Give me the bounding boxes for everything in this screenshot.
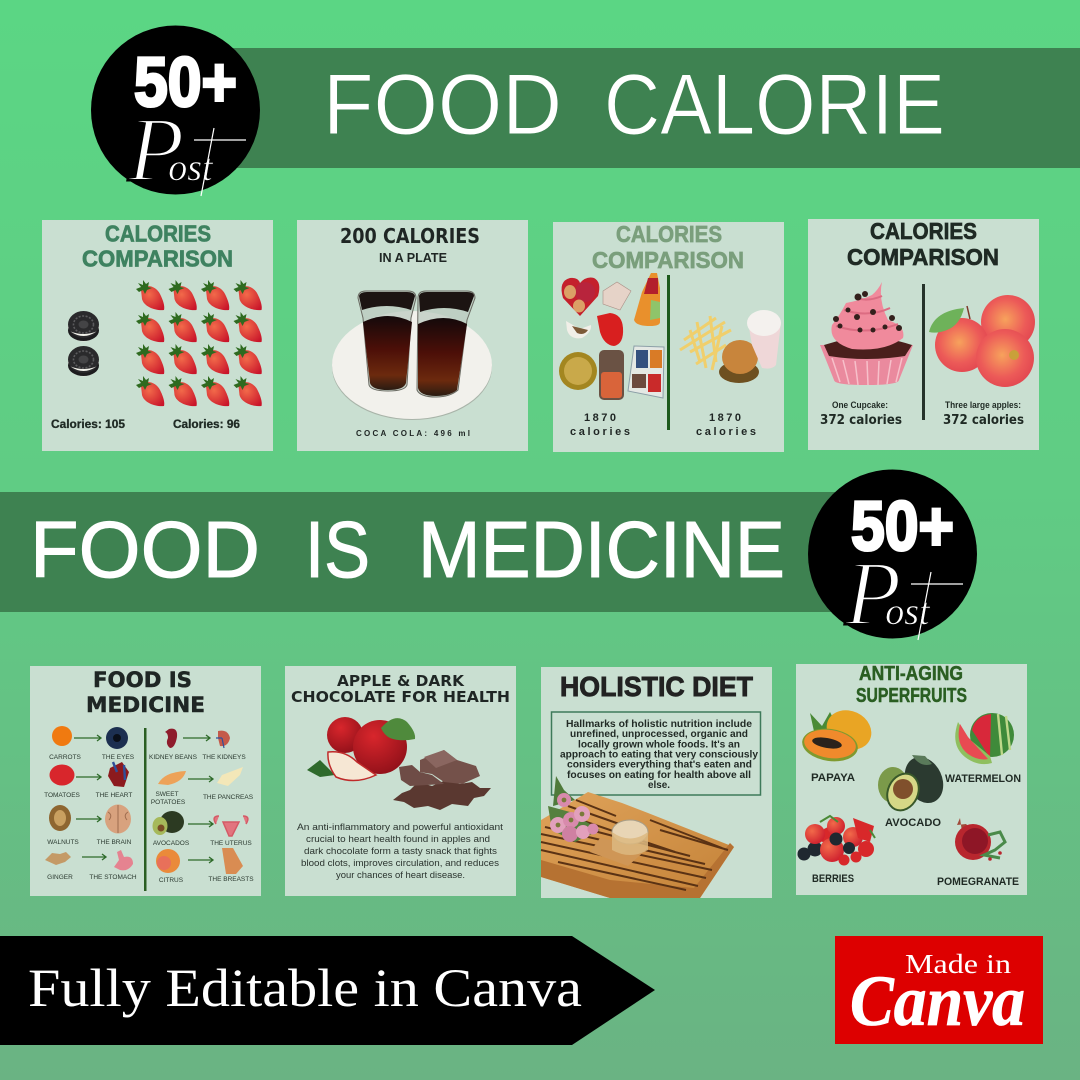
badge: 50+ post top <box>91 26 260 200</box>
body text: crucial to heart health found in apples and <box>306 834 490 844</box>
panel title: 200 CALORIES <box>340 224 480 248</box>
food to organ pairs, right column: THE KIDNEYS <box>202 754 246 761</box>
panel: calories comparison, cupcake and apples <box>808 218 1039 450</box>
fruit: avocado <box>878 751 950 817</box>
label: AVOCADO <box>885 817 941 829</box>
food to organ pairs, left column: THE HEART <box>96 792 132 799</box>
text box: focuses on eating for health above all <box>567 770 751 781</box>
panel title: SUPERFRUITS <box>856 685 967 707</box>
calorie labels: calories <box>570 426 630 438</box>
illustration: healthy food <box>559 273 664 400</box>
illustration: dark chocolate pieces <box>393 750 491 810</box>
illustration: wooden tea tray <box>541 792 734 898</box>
panel title: ANTI-AGING <box>859 663 963 685</box>
heading: food is medicine: IS <box>305 505 370 594</box>
badge: made in canva: Canva <box>850 961 1025 1041</box>
food to organ pairs, right column: THE UTERUS <box>210 840 252 847</box>
calorie labels <box>51 419 240 431</box>
text box: else. <box>648 780 670 791</box>
fruit: watermelon <box>955 713 1014 764</box>
panel: calories comparison, oreos and strawberries <box>42 220 273 451</box>
divider <box>667 275 670 430</box>
divider <box>922 284 925 420</box>
panel title <box>86 668 205 717</box>
panel title: FOOD IS <box>93 668 192 692</box>
food to organ pairs, left column <box>44 726 137 881</box>
illustration: cupcake <box>820 282 913 385</box>
food to organ pairs, left column: THE STOMACH <box>89 874 137 881</box>
panel title: CHOCOLATE FOR HEALTH <box>291 688 510 706</box>
badge: 50+ post middle: 50+ <box>851 487 954 565</box>
text box <box>552 712 760 795</box>
label: PAPAYA <box>811 772 855 784</box>
text box: unrefined, unprocessed, organic and <box>570 729 748 740</box>
calorie labels: 1870 <box>709 412 741 424</box>
body text: blood clots, improves circulation, and reduces <box>301 858 499 868</box>
label: WATERMELON <box>945 773 1021 785</box>
divider <box>144 728 146 891</box>
calorie labels <box>570 412 756 438</box>
arrow banner: fully editable in canva: Fully Editable in Canva <box>28 958 582 1018</box>
food to organ pairs, right column: POTATOES <box>151 799 186 806</box>
heading: food is medicine <box>30 505 785 594</box>
panel title <box>856 663 967 707</box>
caption: COCA COLA: 496 ml <box>356 429 470 438</box>
badge: made in canva <box>835 936 1043 1044</box>
calorie labels: One Cupcake: <box>832 400 888 410</box>
icon: strawberries grid <box>136 280 262 406</box>
heading: food is medicine: FOOD <box>30 505 260 594</box>
food to organ pairs, left column: THE BRAIN <box>97 839 132 846</box>
panel: 200 calories in a plate <box>297 220 528 451</box>
panel title: COMPARISON <box>82 246 233 272</box>
food to organ pairs, left column: THE EYES <box>102 754 135 761</box>
food to organ pairs, right column: THE PANCREAS <box>203 794 254 801</box>
food to organ pairs, right column: AVOCADOS <box>153 840 190 847</box>
heading: food calorie: CALORIE <box>604 57 945 153</box>
food to organ pairs, right column <box>149 729 254 884</box>
calorie labels: calories <box>696 426 756 438</box>
calorie labels: Calories: 96 <box>173 419 240 431</box>
text box: considers everything that's eaten and <box>567 760 752 770</box>
illustration: fast food <box>680 310 781 383</box>
panel title <box>82 220 233 272</box>
panel title: COMPARISON <box>847 244 999 270</box>
panel title: CALORIES <box>105 220 211 246</box>
badge: made in canva: Made in <box>905 949 1012 979</box>
panel title <box>592 221 744 273</box>
food to organ pairs, right column: SWEET <box>155 791 179 798</box>
badge: 50+ post middle: Post <box>844 542 931 644</box>
badge: 50+ post top: 50+ <box>134 43 237 121</box>
illustration: pink flowers <box>548 776 600 842</box>
heading: food is medicine: MEDICINE <box>418 505 785 594</box>
panel: apple and dark chocolate <box>285 666 516 896</box>
illustration: apples <box>929 295 1035 387</box>
panel: holistic diet <box>541 667 772 898</box>
calorie labels: 1870 <box>584 412 616 424</box>
food to organ pairs, left column: TOMATOES <box>44 792 81 799</box>
text box: Hallmarks of holistic nutrition include <box>566 719 752 730</box>
panel: calories comparison, healthy food and fast food <box>553 221 784 452</box>
body text: dark chocolate form a tasty snack that fights <box>304 846 497 856</box>
body text <box>297 822 503 880</box>
panel: anti-aging superfruits <box>796 663 1027 895</box>
panel title: CALORIES <box>870 218 977 244</box>
label: POMEGRANATE <box>937 876 1019 888</box>
heading: food calorie <box>323 57 945 153</box>
calorie labels: 372 calories <box>820 413 902 428</box>
calorie labels: Three large apples: <box>945 400 1021 410</box>
text box: approach to eating that very consciously <box>560 750 758 760</box>
food to organ pairs, left column: CARROTS <box>49 754 82 761</box>
heading: food calorie: FOOD <box>323 57 562 153</box>
panel title: COMPARISON <box>592 247 744 273</box>
calorie labels <box>820 400 1024 428</box>
arrow banner: fully editable in canva <box>0 936 655 1045</box>
fruit: berries <box>798 816 875 866</box>
banner: food calorie <box>215 48 1080 168</box>
icon: oreo cookies <box>68 311 99 376</box>
badge: 50+ post top: Post <box>127 98 214 200</box>
food to organ pairs, right column: CITRUS <box>159 877 184 884</box>
fruit: papaya <box>800 703 878 765</box>
body text: your chances of heart disease. <box>336 870 465 880</box>
panel title: HOLISTIC DIET <box>560 671 753 702</box>
food to organ pairs, right column: THE BREASTS <box>208 876 254 883</box>
panel title <box>847 218 999 270</box>
fruit: pomegranate <box>955 818 1005 861</box>
panel title <box>291 672 510 706</box>
panel title: MEDICINE <box>86 693 205 717</box>
text box: locally grown whole foods. It's an <box>578 740 740 750</box>
food to organ pairs, left column: GINGER <box>47 874 73 881</box>
calorie labels: Calories: 105 <box>51 419 126 431</box>
panel title <box>340 224 480 265</box>
panel: food is medicine chart <box>30 666 261 896</box>
banner: food is medicine <box>0 492 835 612</box>
panel title: CALORIES <box>616 221 722 247</box>
illustration: red apples with slice <box>307 717 415 781</box>
illustration: plate with cola glasses <box>332 291 492 420</box>
body text: An anti-inflammatory and powerful antioxidant <box>297 822 503 832</box>
panel title: IN A PLATE <box>379 250 447 265</box>
panel title: APPLE & DARK <box>337 672 465 690</box>
food to organ pairs, right column: KIDNEY BEANS <box>149 754 198 761</box>
calorie labels: 372 calories <box>943 413 1024 428</box>
label: BERRIES <box>812 873 854 885</box>
badge: 50+ post middle <box>808 470 977 644</box>
food to organ pairs, left column: WALNUTS <box>47 839 79 846</box>
